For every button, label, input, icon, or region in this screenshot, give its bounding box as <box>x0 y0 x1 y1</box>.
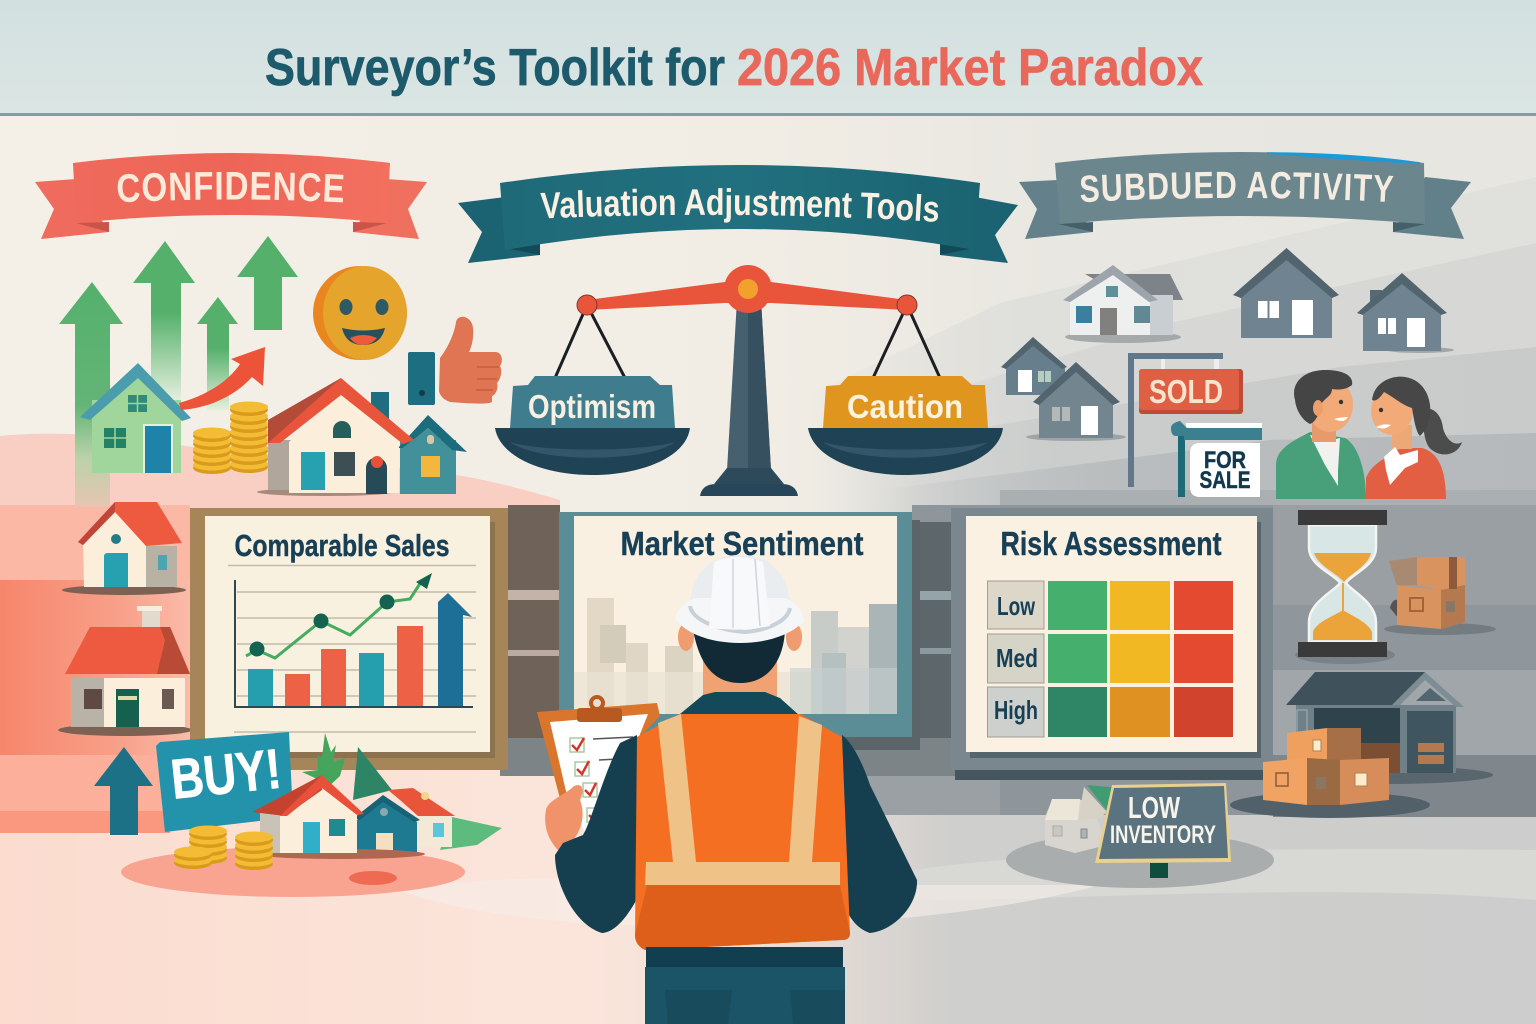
icon: large red roof house <box>257 378 414 496</box>
risk matrix: Med <box>996 643 1038 673</box>
sign board: INVENTORY <box>1110 821 1216 849</box>
icon: sold sign <box>1128 353 1243 487</box>
banner: valuation adjustment tools: Valuation Adjustment Tools <box>540 188 938 223</box>
risk matrix <box>988 581 1233 737</box>
bar chart <box>228 566 476 732</box>
panel: comparable sales <box>190 508 508 770</box>
banner: confidence: CONFIDENCE <box>118 172 344 202</box>
scale pillar <box>700 300 798 496</box>
header bar <box>0 0 1536 116</box>
buy cluster <box>121 732 502 897</box>
icon: blue up arrow <box>94 747 153 835</box>
heading: Market Sentiment <box>620 525 864 562</box>
heading: Comparable Sales <box>234 528 450 563</box>
icon: grey house front left <box>1026 362 1126 441</box>
icon: red roof house upper <box>62 502 186 595</box>
collar <box>680 692 800 716</box>
safety vest <box>635 714 850 950</box>
subdued activity cluster <box>1001 248 1462 499</box>
icon: grey house large <box>1233 248 1339 338</box>
icon: for sale sign: SALE <box>1200 467 1250 494</box>
icon: blue small house <box>354 795 420 853</box>
panel: market sentiment <box>559 512 920 750</box>
icon: smiley face <box>313 266 407 360</box>
neck <box>703 660 777 700</box>
icon: rising green arrows <box>59 236 298 507</box>
left pan with optimism: Optimism <box>528 388 656 425</box>
banner: subdued activity: SUBDUED ACTIVITY <box>1080 172 1394 202</box>
icon: buy sign: BUY! <box>168 737 284 811</box>
right pan with caution <box>808 376 1003 475</box>
icon: chimney behind house <box>371 392 389 422</box>
risk matrix: High <box>994 695 1038 725</box>
sign post <box>1150 863 1168 878</box>
icon: for sale sign <box>1171 421 1262 497</box>
hard hat <box>675 555 804 643</box>
banner: valuation adjustment tools <box>458 165 1018 263</box>
title: 2026 Market Paradox <box>737 39 1203 97</box>
icon: grey house back left <box>1001 337 1067 395</box>
low inventory sign group <box>1006 783 1274 888</box>
scale beam <box>577 265 917 315</box>
icon: right small red house <box>388 788 455 847</box>
side houses left <box>58 502 192 835</box>
title: Surveyor’s Toolkit for <box>265 39 725 97</box>
woman <box>1366 377 1462 499</box>
icon: warehouse with boxes <box>1277 672 1493 784</box>
icon: stacked boxes <box>1230 728 1430 818</box>
banner: confidence <box>35 153 427 239</box>
left pan with optimism <box>495 376 690 475</box>
icon: coins <box>174 826 273 870</box>
icon: thumbs up <box>408 317 502 405</box>
icon: teal house <box>398 415 467 494</box>
surveyor figure <box>537 555 917 1024</box>
trousers <box>645 967 845 1024</box>
man <box>1276 370 1366 499</box>
hair <box>693 630 785 683</box>
sign board <box>1095 783 1231 863</box>
icon: buy sign <box>156 732 293 832</box>
scale: optimism vs caution <box>495 265 1003 496</box>
icon: hourglass <box>1295 510 1395 664</box>
icon: coin stacks <box>193 402 268 474</box>
icon: green house <box>80 363 191 473</box>
confidence cluster <box>59 236 502 507</box>
banner: subdued activity <box>1019 152 1471 239</box>
icon: grey house right <box>1357 273 1454 353</box>
panel: risk assessment <box>951 508 1273 780</box>
icon: for sale sign: FOR <box>1204 447 1246 474</box>
icon: plants <box>302 733 392 800</box>
heading: Risk Assessment <box>1000 525 1222 562</box>
ears <box>678 623 802 651</box>
icon: white house <box>1063 265 1183 343</box>
icon: red growth arrow <box>179 347 265 410</box>
icon: cardboard box <box>1384 557 1496 635</box>
ground shadow <box>121 847 465 897</box>
risk matrix: Low <box>997 591 1036 621</box>
left arm <box>555 735 643 933</box>
clipboard with checklist <box>537 697 660 842</box>
icon: pale house <box>1045 785 1120 853</box>
sign board: LOW <box>1128 790 1181 825</box>
chains <box>555 305 940 378</box>
waistband <box>646 947 843 967</box>
right pan with caution: Caution <box>847 388 963 425</box>
icon: sold sign: SOLD <box>1149 373 1223 410</box>
skyline <box>574 598 897 714</box>
hand <box>545 785 583 850</box>
icon: red roof house lower <box>58 606 192 736</box>
icon: green tail <box>440 817 502 850</box>
icon: red small house <box>252 775 425 859</box>
icon: couple <box>1276 370 1462 499</box>
right arm <box>842 735 917 933</box>
